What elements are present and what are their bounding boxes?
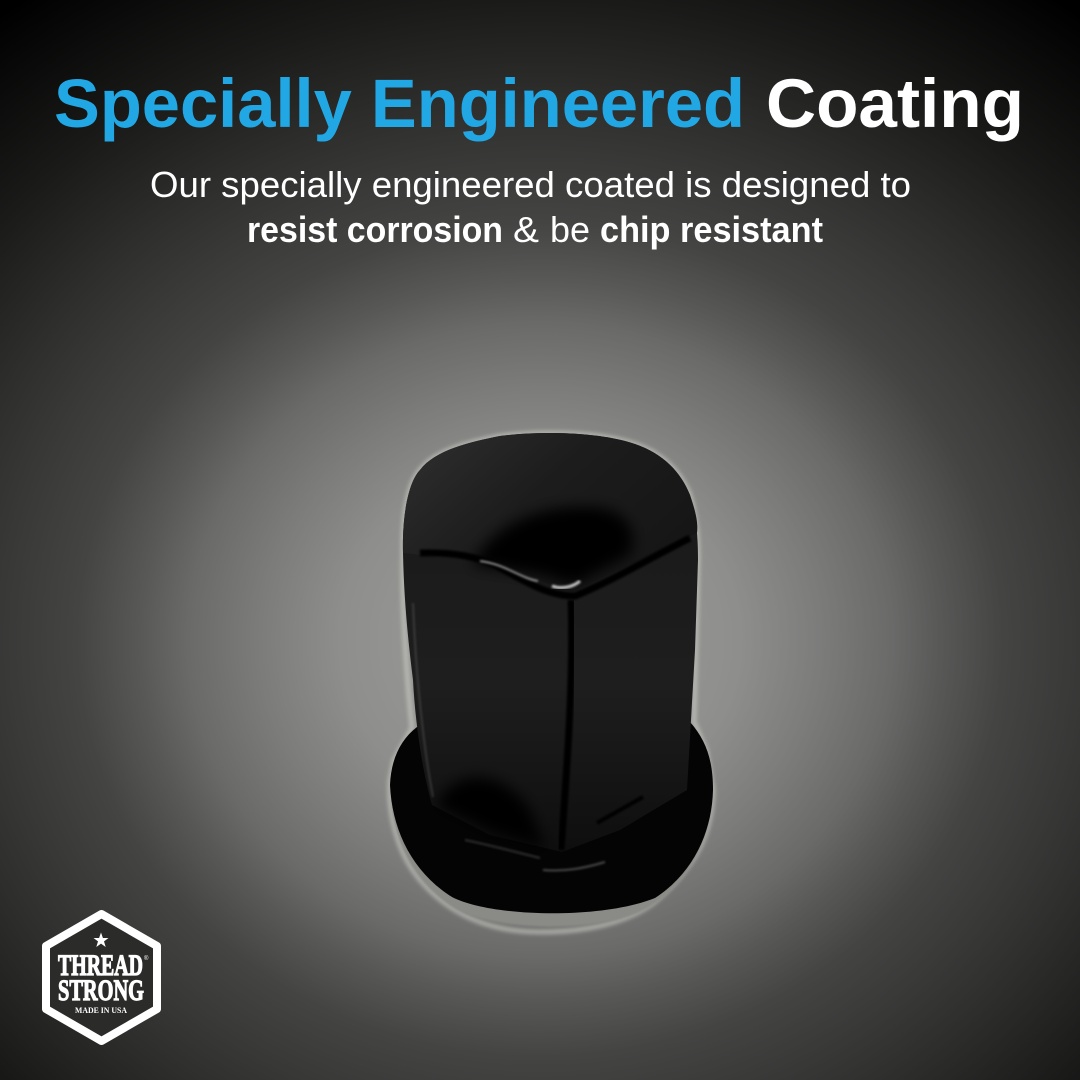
lug nut photo bbox=[390, 433, 713, 932]
logo hexagon bbox=[46, 914, 157, 1041]
washer highlights bbox=[465, 840, 605, 871]
logo wordmark bbox=[58, 949, 144, 1007]
logo tagline: MADE IN USA bbox=[75, 1006, 127, 1015]
nut halo bbox=[390, 433, 713, 932]
subtitle line 2: be bbox=[550, 209, 590, 250]
subtitle line 2: resist corrosion bbox=[247, 209, 503, 250]
subtitle line 2: & bbox=[513, 209, 539, 250]
washer bbox=[390, 722, 713, 913]
subtitle line 1: Our specially engineered coated is designed to bbox=[150, 164, 911, 205]
logo wordmark: THREAD bbox=[58, 949, 143, 982]
dark slash on right face bbox=[597, 797, 643, 823]
logo registered mark: ® bbox=[144, 955, 149, 962]
nut rounded cap bbox=[403, 433, 697, 592]
lower reflection bbox=[436, 778, 545, 850]
subtitle line 2 bbox=[247, 209, 823, 250]
subtitle line 2: chip resistant bbox=[600, 209, 823, 250]
subtitle bbox=[150, 164, 911, 250]
washer silver rim bbox=[392, 800, 712, 927]
title bbox=[54, 65, 1024, 142]
logo wordmark: STRONG bbox=[58, 974, 144, 1007]
nut hex body bbox=[403, 433, 698, 852]
logo: Thread Strong badge bbox=[46, 914, 157, 1041]
nut left rim highlight bbox=[413, 603, 433, 797]
title white part: Coating bbox=[766, 65, 1024, 142]
hex edge shadow and highlight bbox=[420, 538, 690, 850]
logo star bbox=[94, 932, 108, 947]
dark cap reflection bbox=[472, 507, 633, 585]
title blue part: Specially Engineered bbox=[54, 65, 745, 142]
